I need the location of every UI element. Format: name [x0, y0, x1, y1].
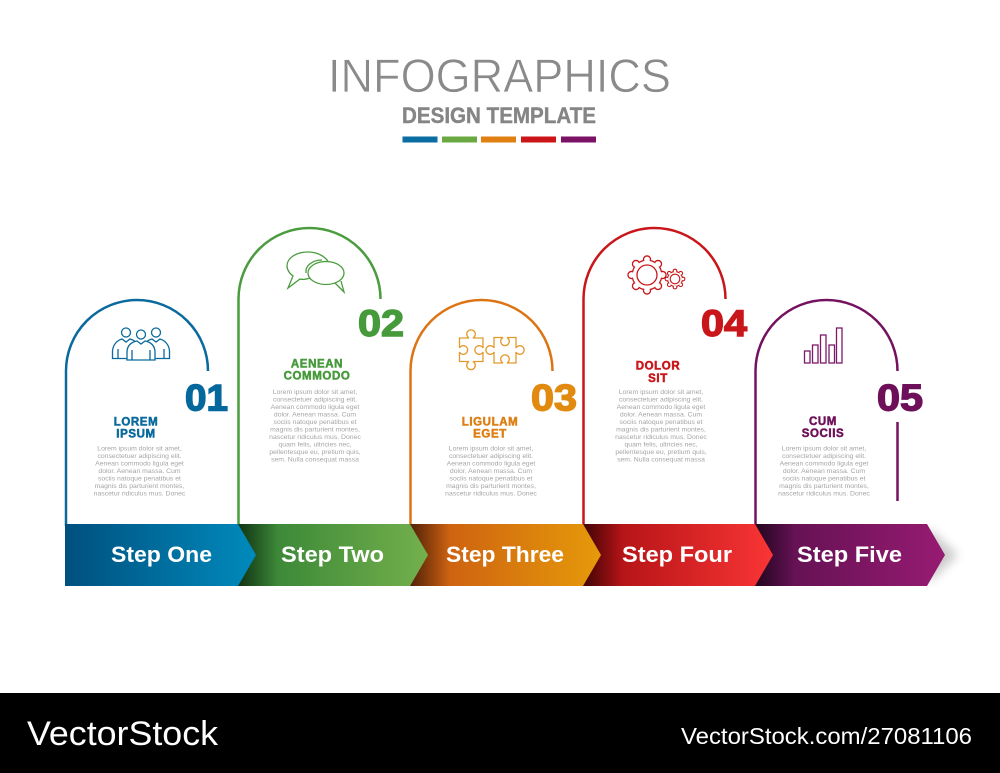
- body text 03: dolor. Aenean massa. Cum: [450, 468, 532, 475]
- panel: step 04: [584, 228, 747, 526]
- body text 02: dolor. Aenean massa. Cum: [274, 412, 356, 418]
- body text 03: consectetuer adipiscing elit.: [449, 453, 533, 460]
- number 05: 05: [877, 378, 923, 418]
- body text 02: magnis dis parturient montes,: [270, 426, 360, 434]
- body text 05: Aenean commodo ligula eget: [780, 460, 868, 468]
- footer logo: VectorStock: [27, 715, 219, 753]
- number 04: 04: [701, 303, 747, 344]
- body text 05: nascetur ridiculus mus. Donec: [778, 490, 870, 498]
- colour key bars: [402, 136, 596, 142]
- body text 04: nascetur ridiculus mus. Donec: [615, 434, 707, 441]
- body text 04: sociis natoque penatibus et: [620, 419, 703, 426]
- body text 04: magnis dis parturient montes,: [616, 426, 706, 434]
- heading 03: LIGULAM: [462, 416, 518, 428]
- arrow band: [65, 524, 958, 586]
- body text 04: Aenean commodo ligula eget: [617, 404, 705, 411]
- body text 05: Lorem ipsum dolor sit amet,: [782, 446, 866, 452]
- body text 01: Aenean commodo ligula eget: [95, 460, 184, 468]
- arch outline 02: [238, 228, 380, 526]
- body text 02: Aenean commodo ligula eget: [271, 404, 359, 411]
- body text 01: nascetur ridiculus mus. Donec: [94, 490, 186, 498]
- body text 01: dolor. Aenean massa. Cum: [98, 468, 181, 475]
- number 03: 03: [531, 378, 577, 418]
- drop shadow of last arrow: [928, 527, 958, 584]
- label: step five: Step Five: [797, 542, 902, 567]
- heading 02: AENEAN: [291, 358, 343, 370]
- footer url: VectorStock.com/27081106: [681, 723, 972, 749]
- icon: speech bubbles: [287, 252, 344, 292]
- heading 04: SIT: [648, 373, 668, 385]
- arrow: step three: [410, 524, 601, 586]
- label: step one: Step One: [111, 542, 212, 567]
- body text 02: consectetuer adipiscing elit.: [273, 396, 357, 404]
- body text 04: consectetuer adipiscing elit.: [619, 396, 703, 404]
- panel: step 01: [66, 300, 228, 526]
- icon: people: [112, 328, 170, 360]
- body text 03: sociis natoque penatibus et: [450, 476, 533, 482]
- arch outline 03: [410, 300, 552, 526]
- body text 04: Lorem ipsum dolor sit amet,: [619, 389, 703, 396]
- body text 01: magnis dis parturient montes,: [95, 483, 184, 490]
- heading 04: DOLOR: [636, 360, 680, 372]
- body text 04: pellentesque eu, pretium quis,: [615, 449, 707, 456]
- body text 05: consectetuer adipiscing elit.: [782, 453, 866, 460]
- body text 05: dolor. Aenean massa. Cum: [783, 468, 865, 475]
- icon: puzzle pieces: [460, 330, 524, 370]
- panel: step 05: [756, 300, 923, 526]
- heading 01: IPSUM: [116, 428, 156, 440]
- arch outline 04: [584, 228, 726, 526]
- number 02: 02: [358, 303, 404, 344]
- body text 01: consectetuer adipiscing elit.: [97, 453, 182, 460]
- panel: step 02: [238, 228, 404, 526]
- subtitle: DESIGN TEMPLATE: [402, 103, 596, 128]
- body text 04: quam felis, ultricies nec,: [624, 442, 698, 448]
- body text 02: nascetur ridiculus mus. Donec: [269, 434, 361, 441]
- body text 02: quam felis, ultricies nec,: [278, 442, 352, 448]
- body text 03: nascetur ridiculus mus. Donec: [445, 490, 537, 498]
- body text 01: Lorem ipsum dolor sit amet,: [97, 446, 182, 452]
- label: step three: Step Three: [446, 542, 564, 567]
- label: step two: Step Two: [281, 542, 384, 567]
- label: step four: Step Four: [622, 542, 732, 567]
- arrow: step one: [65, 524, 256, 586]
- body text 02: pellentesque eu, pretium quis,: [269, 449, 361, 456]
- body text 02: sem. Nulla consequat massa: [271, 456, 359, 464]
- heading 05: CUM: [809, 416, 837, 428]
- body text 03: Aenean commodo ligula eget: [447, 460, 535, 468]
- body text 05: sociis natoque penatibus et: [783, 476, 866, 482]
- body text 02: Lorem ipsum dolor sit amet,: [273, 389, 357, 396]
- arrow: step four: [583, 524, 773, 586]
- panel: step 03: [410, 300, 577, 526]
- body text 02: sociis natoque penatibus et: [274, 419, 357, 426]
- arch outline 05: [756, 300, 898, 526]
- body text 01: sociis natoque penatibus et: [98, 476, 181, 482]
- body text 04: dolor. Aenean massa. Cum: [620, 412, 702, 418]
- body text 03: Lorem ipsum dolor sit amet,: [449, 446, 533, 452]
- arrow: step five: [755, 524, 945, 586]
- heading 02: COMMODO: [284, 370, 350, 382]
- icon: bar chart: [804, 328, 842, 363]
- arrow: step two: [238, 524, 428, 586]
- heading 03: EGET: [473, 428, 507, 440]
- body text 05: magnis dis parturient montes,: [779, 483, 869, 490]
- number 01: 01: [185, 378, 228, 418]
- body text 04: sem. Nulla consequat massa: [617, 456, 705, 464]
- icon: gears: [627, 255, 685, 295]
- arch outline 01: [66, 300, 208, 526]
- title: INFOGRAPHICS: [328, 49, 671, 102]
- heading 01: LOREM: [114, 416, 158, 428]
- heading 05: SOCIIS: [802, 428, 844, 440]
- body text 03: magnis dis parturient montes,: [446, 483, 536, 490]
- footer bar: [0, 693, 1000, 773]
